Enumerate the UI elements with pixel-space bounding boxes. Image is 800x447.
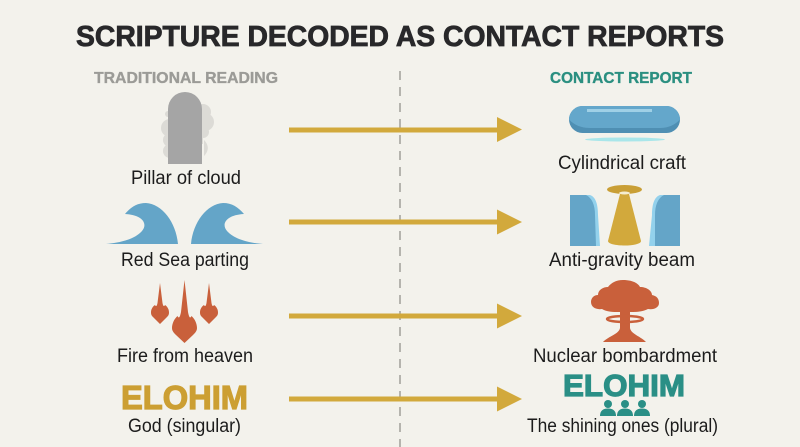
word: elohim gold: ELOHIM (121, 379, 248, 416)
label: red sea parting: Red Sea parting (121, 250, 249, 271)
label: god singular: God (singular) (128, 416, 241, 437)
icon: mushroom cloud (591, 280, 659, 342)
icon: pillar of cloud (161, 92, 214, 164)
label: nuclear bombardment: Nuclear bombardment (533, 346, 718, 367)
label: the shining ones: The shining ones (plural) (527, 416, 718, 437)
icon: three people (600, 400, 650, 416)
word: elohim teal: ELOHIM (563, 368, 685, 403)
arrow 4 (289, 386, 522, 412)
label: anti-gravity beam: Anti-gravity beam (549, 250, 695, 271)
heading: traditional reading: TRADITIONAL READING (94, 70, 278, 87)
icon: anti-gravity beam (570, 185, 680, 246)
arrow 2 (289, 210, 522, 234)
icon: cylindrical craft (569, 106, 680, 142)
label: pillar of cloud: Pillar of cloud (131, 168, 241, 189)
icon: fire from heaven (151, 280, 218, 343)
arrow 1 (289, 117, 522, 142)
label: fire from heaven: Fire from heaven (117, 346, 253, 367)
icon: red sea waves (106, 203, 263, 244)
title: SCRIPTURE DECODED AS CONTACT REPORTS (76, 21, 724, 53)
label: cylindrical craft: Cylindrical craft (558, 153, 687, 174)
arrow 3 (289, 304, 522, 328)
heading: contact report: CONTACT REPORT (550, 70, 693, 87)
